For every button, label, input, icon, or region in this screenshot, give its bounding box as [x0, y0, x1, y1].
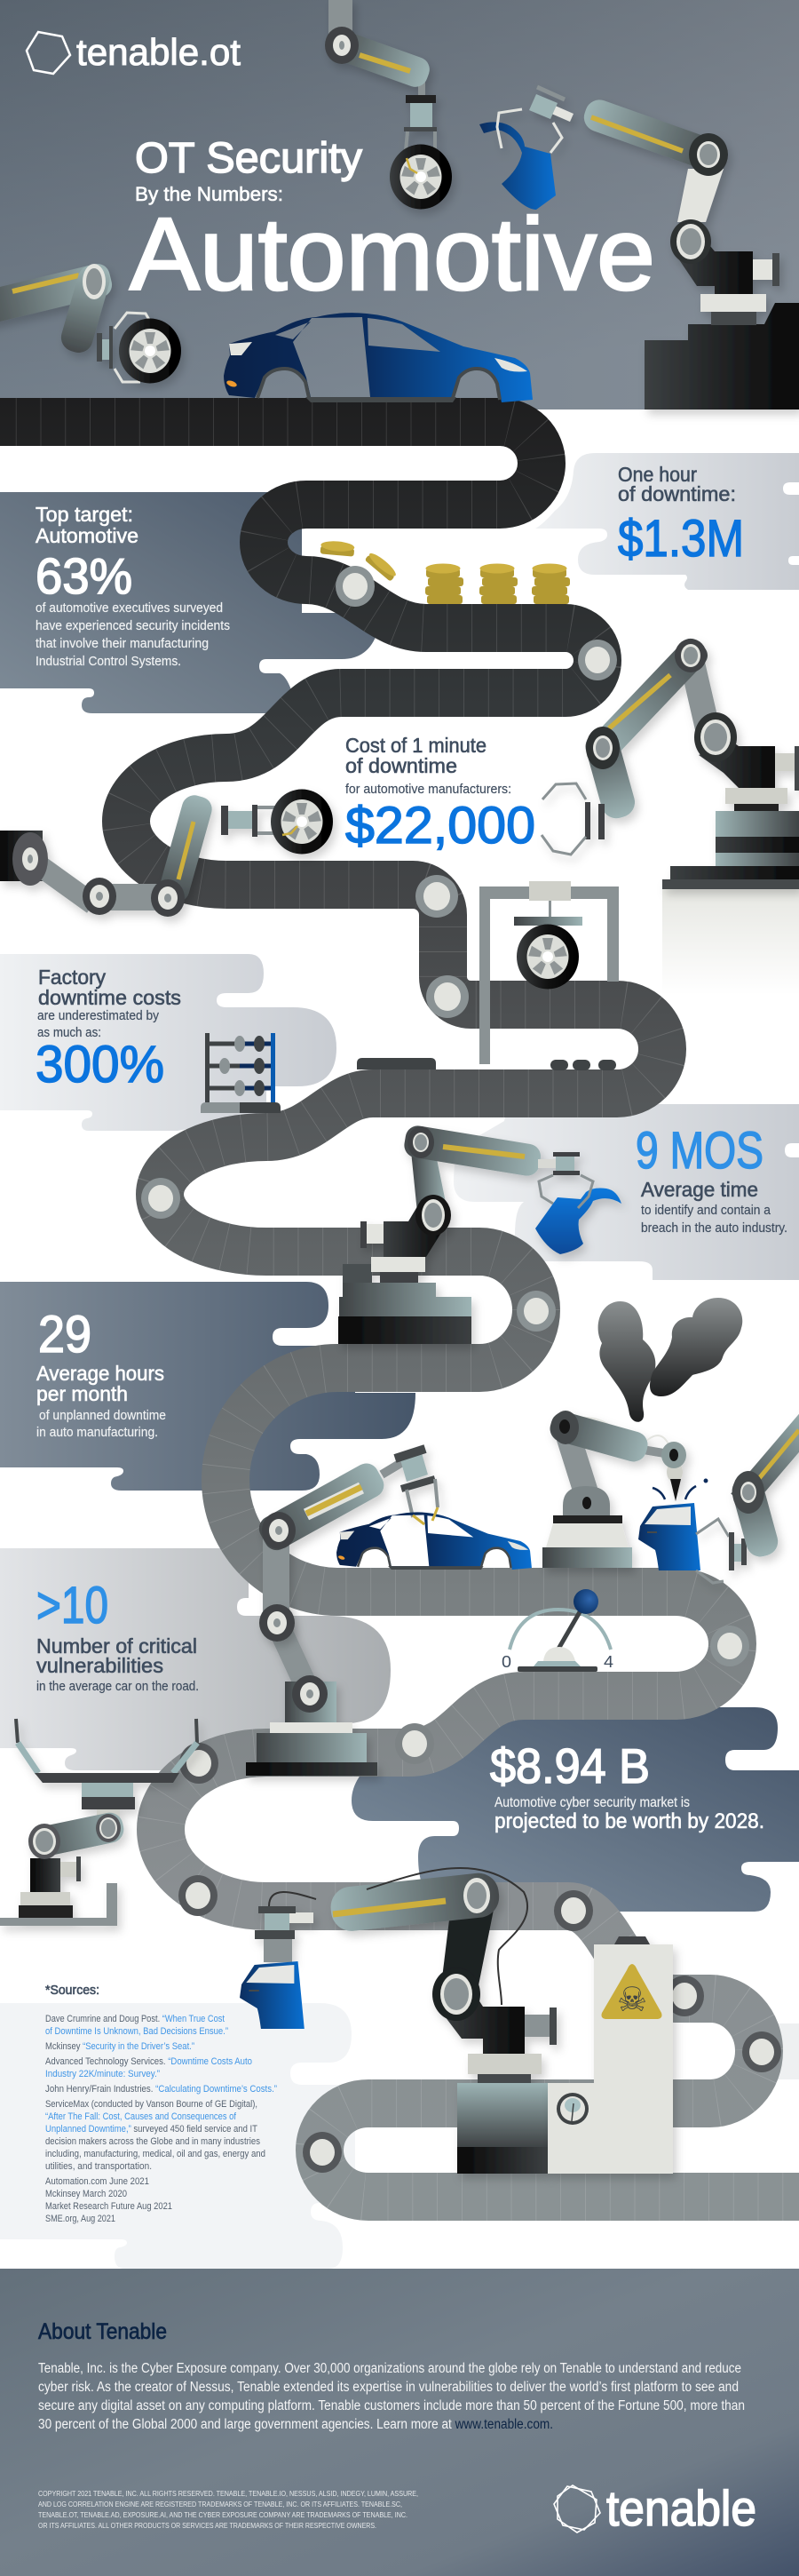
text: cost of one minute — [345, 734, 535, 855]
text: sources: utilities, and transportation. — [45, 2161, 152, 2172]
text: sources: including, manufacturing, medical, oil and gas, energy and — [45, 2149, 265, 2159]
robot arm: large with door — [255, 1872, 557, 2174]
robot arm: left with wheel — [0, 261, 181, 384]
title: By the Numbers: — [135, 183, 283, 205]
text: cost of one minute: $22,000 — [345, 797, 535, 855]
text: nine months: 9 MOS — [636, 1122, 763, 1180]
wheel on left gripper — [221, 789, 333, 855]
logo: tenable: tenable — [606, 2480, 756, 2536]
text: market value: projected to be worth by 2028. — [494, 1809, 764, 1833]
text: critical vulnerabilities: in the average car on the road. — [36, 1680, 199, 1694]
text: sources: ServiceMax (conducted by Vanson Bourne of GE Digital), — [45, 2099, 257, 2110]
text: cost of one minute: of downtime — [345, 754, 457, 777]
conveyor belt — [0, 422, 799, 2197]
panel: one hour background — [535, 453, 799, 590]
text: top target — [36, 503, 230, 669]
text: sources: “After The Fall: Cost, Causes and Consequences of — [45, 2111, 237, 2122]
text: factory downtime costs: downtime costs — [38, 986, 181, 1009]
text: one hour of downtime — [618, 463, 744, 568]
belt pulleys — [141, 566, 781, 2173]
gold coins — [320, 540, 570, 604]
text: sources: SME.org, Aug 2021 — [45, 2214, 115, 2224]
text: cost of one minute: Cost of 1 minute — [345, 734, 487, 757]
text: critical vulnerabilities: Number of critical — [36, 1634, 197, 1658]
panel: market value background — [352, 1707, 799, 1912]
text: factory downtime costs — [36, 966, 181, 1093]
tire press machine — [479, 881, 619, 1064]
text: top target: Automotive — [36, 524, 138, 547]
gauge: 0 to 4: 4 — [604, 1653, 613, 1671]
blue door on large arm — [240, 1961, 305, 2029]
text: about tenable: 30 percent of the Global 2000 and large government agencies. Learn more at www.tenable.com. — [38, 2417, 553, 2432]
panel: right light backdrop — [662, 888, 799, 995]
panel: 29 hours background — [0, 1282, 415, 1491]
panel: critical vulnerabilities background — [0, 1548, 391, 1770]
text: copyright: TENABLE.OT, TENABLE.AD, EXPOSURE.AI, AND THE CYBER EXPOSURE COMPANY ARE TRADEMARKS OF TENABLE, INC. — [38, 2510, 407, 2519]
text: factory downtime costs: Factory — [38, 966, 106, 989]
warning sign with skull — [602, 1964, 662, 2019]
text: sources: Automation.com June 2021 — [45, 2176, 149, 2187]
text: sources: decision makers across the Globe and in many industries — [45, 2136, 260, 2147]
text: 29 hours: in auto manufacturing. — [36, 1426, 158, 1440]
pressure dial — [557, 2093, 589, 2125]
text: factory downtime costs: are underestimated by — [37, 1009, 160, 1023]
text: top target: have experienced security incidents — [36, 619, 230, 633]
title: Automotive — [130, 196, 655, 312]
text: nine months: breach in the auto industry. — [641, 1221, 787, 1236]
panel: factory background — [0, 954, 336, 1131]
machine base center — [246, 1604, 377, 1776]
header background — [0, 0, 799, 409]
text: copyright: COPYRIGHT 2021 TENABLE, INC. ALL RIGHTS RESERVED. TENABLE, TENABLE.IO, NESSUS, ALSID, INDEGY, LUMIN, ASSURE, — [38, 2489, 418, 2498]
panel: nine months background — [454, 1104, 799, 1280]
text: market value — [490, 1738, 764, 1833]
logo: tenable — [554, 2480, 756, 2536]
text: top target: that involve their manufacturing — [36, 637, 209, 651]
text: market value: Automotive cyber security market is — [494, 1795, 690, 1810]
text: top target: Industrial Control Systems. — [36, 655, 181, 669]
panel: sources background — [0, 2003, 355, 2269]
gauge: 0 to 4: 0 — [502, 1653, 511, 1671]
text: sources: Mckinsey March 2020 — [45, 2189, 127, 2199]
text: about tenable — [38, 2319, 745, 2432]
text: top target: Top target: — [36, 503, 133, 526]
gauge: 0 to 4 — [502, 1589, 613, 1672]
control cabinet — [548, 1936, 673, 2174]
blue fender held at top — [479, 122, 556, 210]
text: top target: 63% — [36, 548, 132, 605]
text: copyright: OR ITS AFFILIATES. ALL OTHER PRODUCTS OR SERVICES ARE TRADEMARKS OF THEIR RESPECTIVE OWNERS. — [38, 2521, 376, 2530]
text: sources: of Downtime Is Unknown, Bad Decisions Ensue.” — [45, 2026, 228, 2037]
title — [130, 135, 655, 312]
text: 29 hours: of unplanned downtime — [39, 1409, 166, 1423]
text: factory downtime costs: as much as: — [37, 1026, 101, 1040]
robot arm: center with fender — [338, 1124, 621, 1344]
text: factory downtime costs: 300% — [36, 1036, 164, 1093]
belt bumps — [357, 1058, 616, 1070]
robot arm: top right — [497, 87, 799, 409]
footer background — [0, 2269, 799, 2576]
text: nine months — [636, 1122, 787, 1236]
robot arm: right middle — [542, 634, 799, 889]
robot arm: top with wheel — [322, 0, 452, 210]
robot cables — [269, 1868, 527, 2005]
text: market value: $8.94 B — [490, 1738, 650, 1793]
text: 29 hours: 29 — [38, 1306, 91, 1364]
text: one hour of downtime: One hour — [618, 463, 697, 486]
text: 29 hours — [36, 1306, 166, 1440]
text: copyright — [38, 2489, 418, 2530]
text: sources: Unplanned Downtime,” surveyed 450 field service and IT — [45, 2124, 257, 2135]
warning sign with skull: ☠ — [617, 1980, 647, 2019]
sparks — [653, 1480, 707, 1499]
text: about tenable: About Tenable — [38, 2319, 167, 2344]
text: nine months: to identify and contain a — [641, 1204, 771, 1218]
robot arm: left tray — [0, 1719, 197, 1926]
panel: right edge backdrop — [771, 2023, 799, 2079]
text: sources: Advanced Technology Services. “Downtime Costs Auto — [45, 2056, 252, 2067]
text: one hour of downtime: $1.3M — [618, 510, 744, 568]
text: sources: John Henry/Frain Industries. “Calculating Downtime’s Costs.” — [45, 2084, 277, 2095]
blue door being welded — [638, 1503, 700, 1570]
text: one hour of downtime: of downtime: — [618, 482, 736, 505]
car body on belt — [224, 313, 533, 402]
text: cost of one minute: for automotive manufacturers: — [345, 783, 511, 797]
robot arm: left of car with gripper — [255, 1449, 438, 1694]
text: critical vulnerabilities — [36, 1577, 199, 1694]
text: sources: Market Research Future Aug 2021 — [45, 2201, 172, 2212]
text: top target: of automotive executives surveyed — [36, 601, 223, 616]
text: nine months: Average time — [641, 1178, 758, 1201]
text: copyright: AND LOG CORRELATION ENGINE ARE REGISTERED TRADEMARKS OF TENABLE, INC. OR ITS AFFILIATES. TENABLE.SC, — [38, 2500, 402, 2508]
smoke plumes — [598, 1298, 742, 1422]
text: critical vulnerabilities: >10 — [36, 1577, 108, 1634]
text: sources: Mckinsey “Security in the Driver’s Seat.” — [45, 2041, 194, 2052]
text: sources: Industry 22K/minute: Survey.” — [45, 2069, 160, 2079]
text: sources: *Sources: — [45, 1983, 99, 1998]
text: 29 hours: Average hours — [36, 1362, 164, 1385]
text: critical vulnerabilities: vulnerabilities — [36, 1654, 163, 1677]
robot arm: welding door — [542, 1409, 686, 1568]
robot arm: lower left with joints — [0, 792, 215, 917]
icon: abacus — [201, 1033, 281, 1113]
text: sources: Dave Crumrine and Doug Post. “When True Cost — [45, 2014, 225, 2024]
title: OT Security — [135, 135, 362, 182]
text: sources — [45, 1983, 277, 2224]
logo: tenable.ot: tenable.ot — [76, 31, 241, 73]
panel: top target background — [0, 492, 378, 713]
text: 29 hours: per month — [36, 1382, 128, 1405]
robot arm: right edge with gripper — [696, 1406, 799, 1583]
car on belt, center — [336, 1507, 532, 1570]
